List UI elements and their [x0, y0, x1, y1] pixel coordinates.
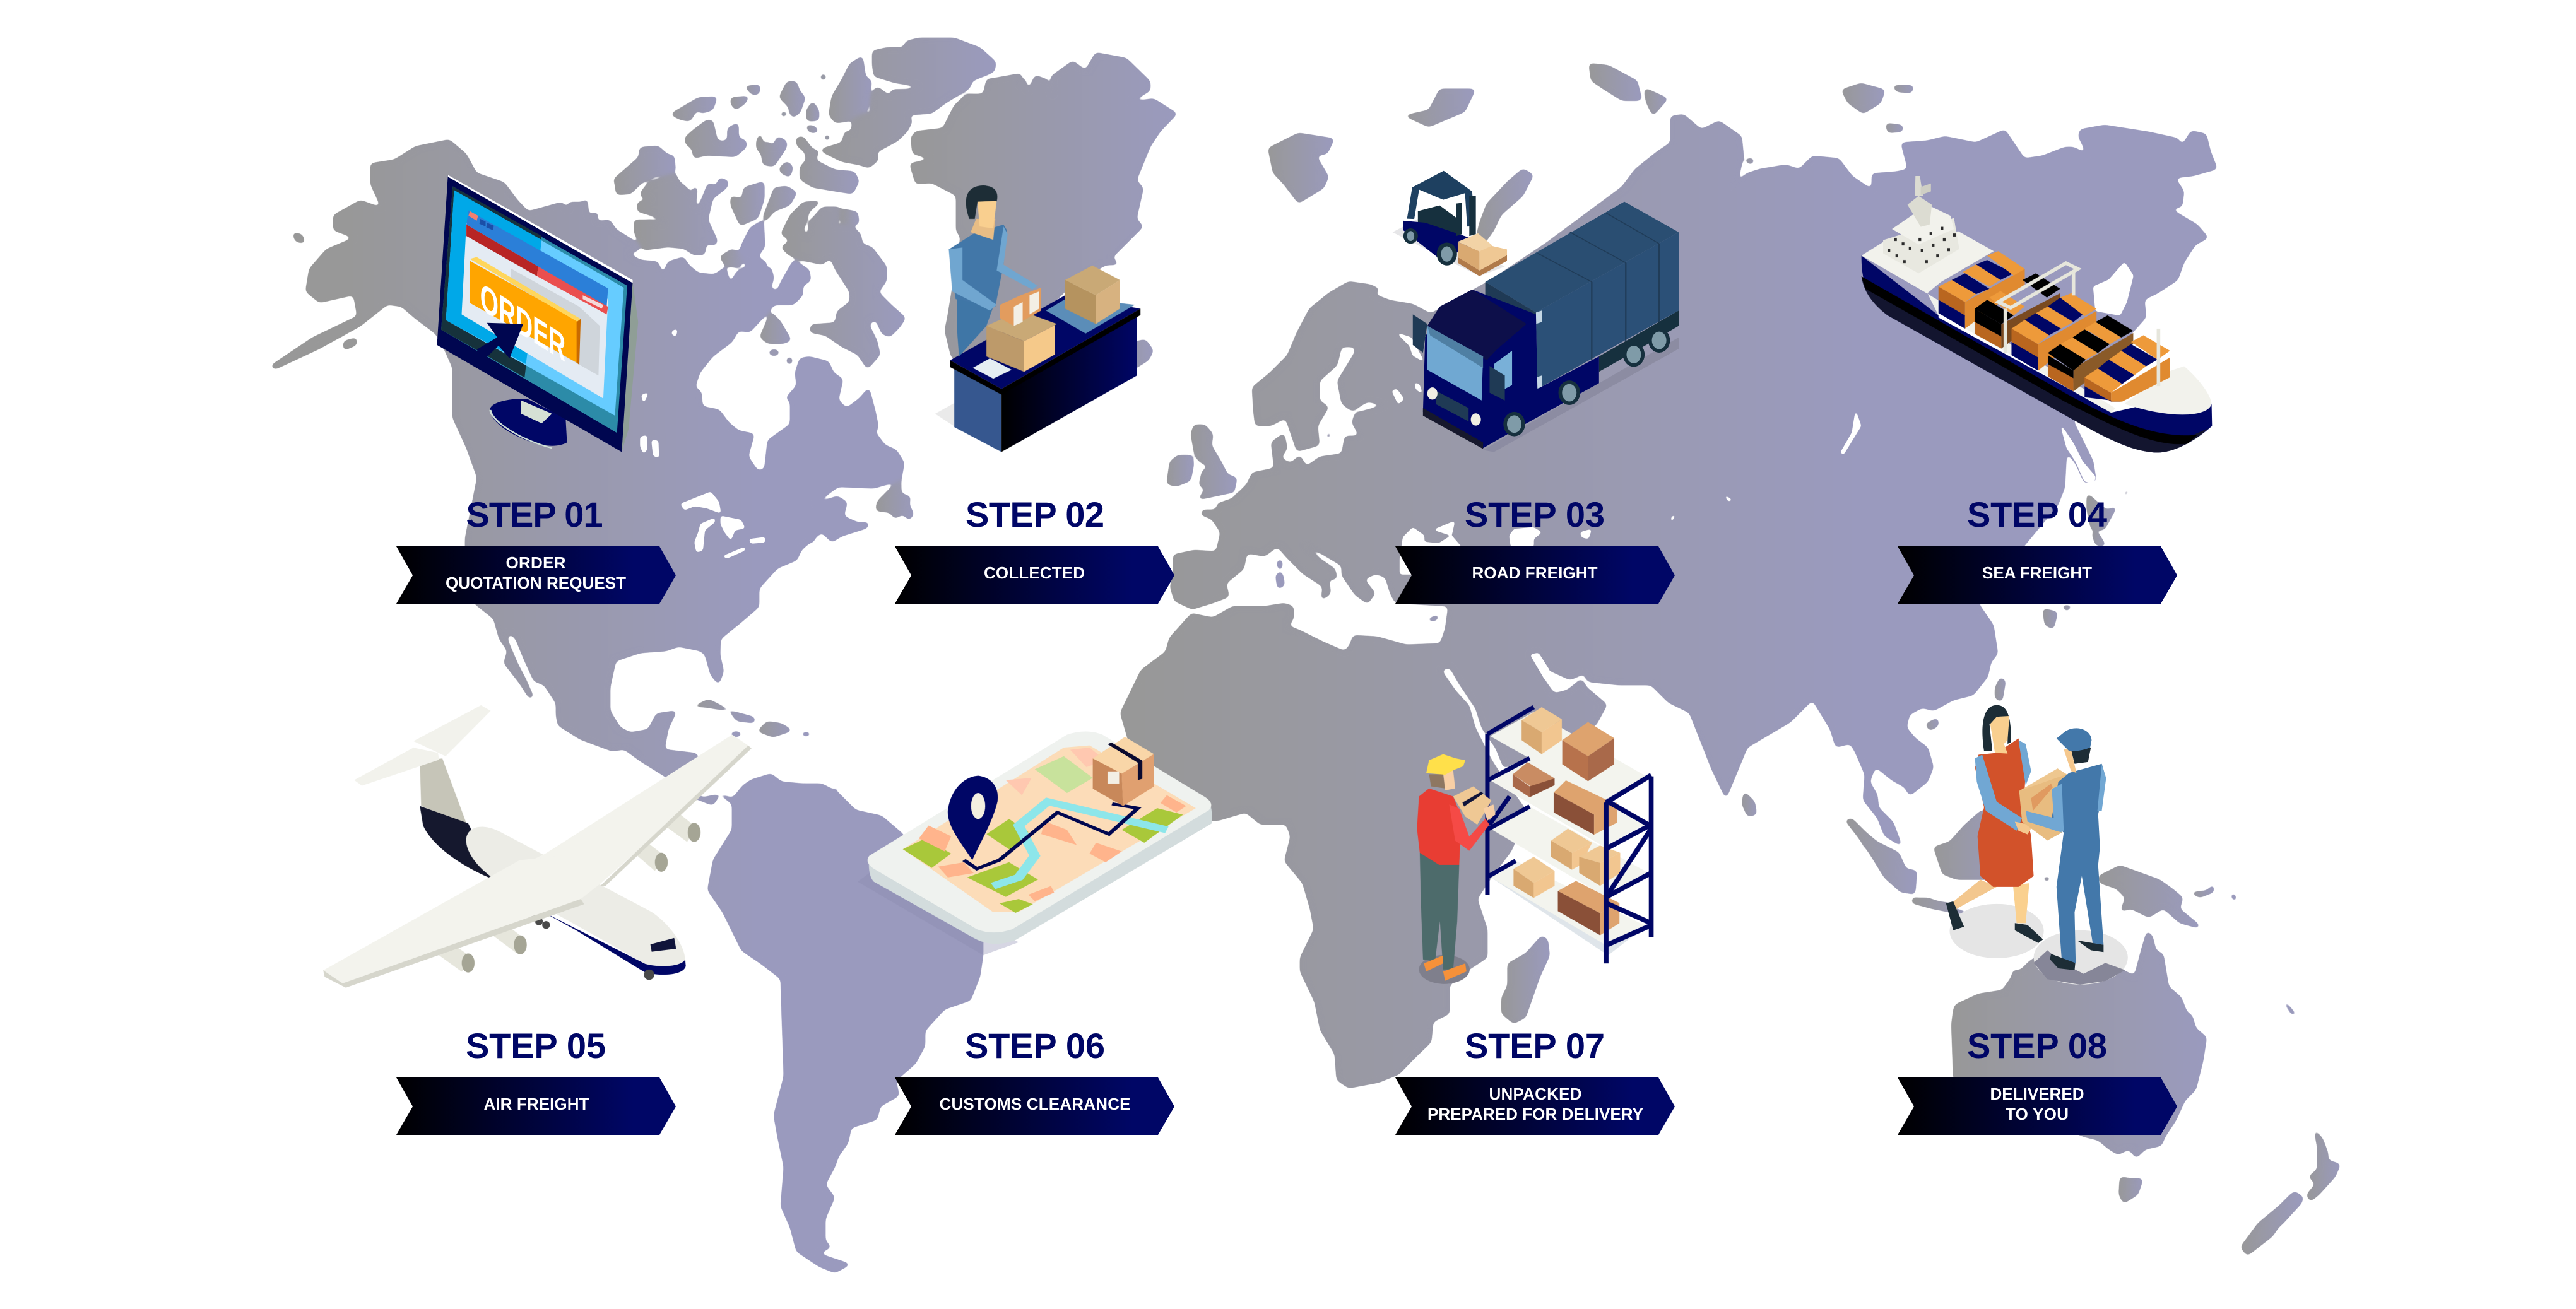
- step 03: [1395, 495, 1675, 604]
- map: Eurasia and Africa: [1120, 114, 2218, 1088]
- step 03 heading: STEP 03: [1465, 495, 1605, 534]
- map: Novaya Zemlya and Russian arctic islands: [1268, 89, 1533, 245]
- world map: [236, 38, 2341, 1273]
- step 04 heading: STEP 04: [1967, 495, 2107, 534]
- Great Lakes: [680, 492, 765, 558]
- deck: [1862, 232, 2212, 414]
- step 03 banner label: ROAD FREIGHT: [1472, 563, 1598, 582]
- icon: delivery truck: [1413, 202, 1679, 452]
- map: Canadian arctic and islands: [568, 38, 996, 543]
- desk: [935, 295, 1140, 452]
- hull: [1862, 255, 2212, 452]
- step 01 banner label: QUOTATION REQUEST: [446, 573, 626, 592]
- route line: [964, 804, 1138, 869]
- step 06: [895, 1026, 1174, 1135]
- step 02 heading: STEP 02: [966, 495, 1104, 534]
- shelf planes: [1490, 712, 1648, 955]
- map: Sri Lanka: [1742, 791, 1757, 817]
- map: New Zealand south: [2240, 1191, 2304, 1256]
- cursor arrow: [476, 323, 523, 360]
- step 04 banner: [1898, 546, 2177, 604]
- step 01 heading: STEP 01: [466, 495, 603, 534]
- Lake Baikal, Sea of Okhotsk and Yellow Sea: [1670, 262, 2133, 524]
- step 08 banner label: [1990, 1084, 2084, 1124]
- Black Sea, Caspian Sea and White Sea: [1392, 333, 1592, 682]
- wings: [323, 735, 752, 988]
- map: inland seas and lakes: [641, 262, 2133, 682]
- step 07 banner label: PREPARED FOR DELIVERY: [1427, 1105, 1643, 1124]
- parcel: [1093, 737, 1154, 806]
- map: Greenland: [909, 52, 1178, 363]
- tail: [354, 705, 491, 825]
- ground shadows: [1949, 904, 2128, 985]
- step 05 heading: STEP 05: [466, 1026, 606, 1065]
- map: Australia, Indonesia and Oceania: [1845, 677, 2341, 1249]
- icon: warehouse shelves and worker: [1417, 707, 1651, 984]
- map: Alaska small islands: [236, 232, 357, 383]
- step 07 heading: STEP 07: [1465, 1026, 1605, 1065]
- step 02 banner label: COLLECTED: [984, 563, 1085, 582]
- step 02 banner: [895, 546, 1174, 604]
- customer: [1946, 705, 2043, 943]
- step 01 banner: [396, 546, 676, 604]
- step 06 banner label: CUSTOMS CLEARANCE: [939, 1095, 1131, 1113]
- step 05 banner: [396, 1077, 676, 1135]
- monitor body: [437, 175, 638, 452]
- map: European and Mediterranean islands: [1110, 339, 1440, 621]
- icon: cargo airplane: [323, 705, 752, 988]
- step 06 heading: STEP 06: [965, 1026, 1105, 1065]
- step 02: [895, 495, 1174, 604]
- step 01 banner label: ORDER: [506, 553, 566, 572]
- phone body: [868, 731, 1212, 944]
- step 08 banner label: TO YOU: [2006, 1105, 2069, 1124]
- step 04 banner label: SEA FREIGHT: [1982, 563, 2092, 582]
- order button: ORDER: [480, 275, 565, 371]
- parcel: [2019, 768, 2067, 840]
- order button: [470, 257, 581, 371]
- shelf frame back: [1487, 707, 1533, 895]
- location pin: [948, 776, 998, 860]
- step 03 banner: [1395, 546, 1675, 604]
- map screen: [903, 746, 1196, 913]
- cab: [1413, 290, 1599, 449]
- step 07 banner: [1395, 1077, 1675, 1135]
- step 07 banner label: [1427, 1084, 1643, 1124]
- map: Madagascar: [1501, 936, 1550, 1024]
- step 04: [1898, 495, 2177, 604]
- step 05 banner label: AIR FREIGHT: [483, 1095, 589, 1113]
- step 07 banner label: UNPACKED: [1489, 1084, 1581, 1103]
- icon: computer monitor with order button: [437, 175, 638, 452]
- step 07: [1395, 1026, 1675, 1135]
- step 06 banner: [895, 1077, 1174, 1135]
- icon: forklift with pallet: [1393, 173, 1507, 276]
- superstructure and mast: [1883, 176, 1959, 273]
- step 08 heading: STEP 08: [1967, 1026, 2107, 1065]
- wheels: [1503, 328, 1670, 437]
- worker: [1417, 754, 1496, 984]
- icon: worker at packing desk: [935, 185, 1140, 452]
- monitor stand: [490, 399, 567, 448]
- worker: [948, 185, 1037, 356]
- step 08 banner: [1898, 1077, 2177, 1135]
- containers: [1939, 251, 2170, 402]
- icon: smartphone with map, pin and parcel: [858, 731, 1212, 955]
- icon: container ship: [1862, 176, 2212, 452]
- trailer: [1486, 202, 1679, 389]
- step 01 banner label: [446, 553, 626, 592]
- icon: courier handing parcel to customer: [1946, 705, 2128, 985]
- parcels on the desk: [986, 266, 1120, 372]
- fuselage: [420, 806, 686, 980]
- step 08: [1898, 1026, 2177, 1135]
- shelf frame front: [1606, 775, 1651, 963]
- step 08 banner label: DELIVERED: [1990, 1084, 2084, 1103]
- crane gantry: [1998, 263, 2158, 386]
- shelf parcels: [1513, 707, 1620, 936]
- step 01: [396, 495, 676, 604]
- map: Americas mainland: [270, 139, 983, 1273]
- step 05: [396, 1026, 676, 1135]
- lakes of Canada: [641, 288, 840, 458]
- courier: [2026, 728, 2106, 970]
- engines: [436, 814, 700, 973]
- map: Caribbean islands: [690, 699, 840, 789]
- phone shadow: [858, 873, 1019, 955]
